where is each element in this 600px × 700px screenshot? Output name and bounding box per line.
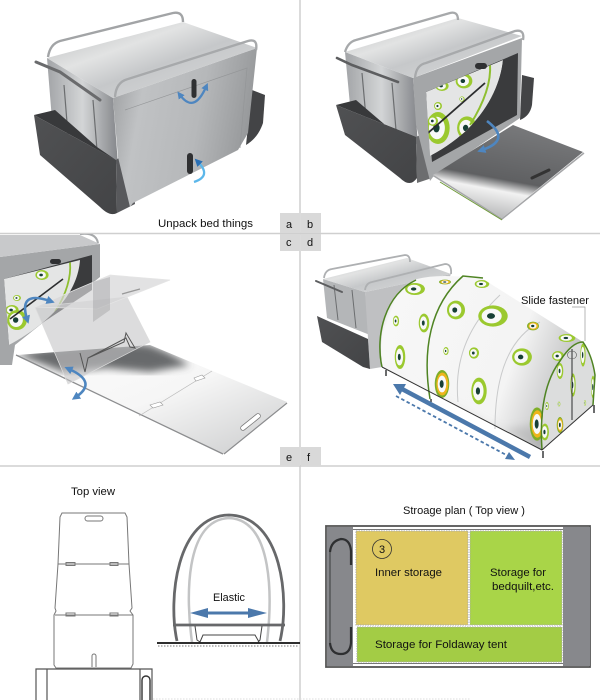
tab b: b bbox=[307, 219, 313, 231]
tab c: c bbox=[286, 237, 292, 249]
title: Stroage plan ( Top view ) bbox=[403, 505, 525, 517]
tray bbox=[317, 316, 370, 369]
opening bbox=[426, 53, 518, 162]
handle bbox=[85, 516, 103, 521]
right end panel bbox=[563, 527, 590, 666]
outer arch bbox=[174, 515, 284, 641]
label: inner storage: Inner storage bbox=[375, 567, 442, 579]
zone: foldaway tent bbox=[357, 627, 562, 662]
side handle bbox=[36, 62, 100, 100]
tent eyes bbox=[393, 280, 575, 441]
left side face bbox=[47, 58, 118, 165]
front face bbox=[113, 48, 257, 207]
fold plate bbox=[433, 125, 583, 218]
tab e bbox=[280, 447, 300, 466]
plate outline bbox=[54, 513, 133, 668]
arrow: elastic bbox=[190, 608, 267, 618]
box side bbox=[323, 279, 370, 335]
tray bbox=[336, 100, 416, 137]
box front bbox=[365, 274, 451, 369]
frame bbox=[0, 244, 100, 365]
tab a: a bbox=[286, 219, 293, 231]
arrow: dashed slide direction bbox=[396, 396, 515, 460]
zipper bbox=[571, 349, 573, 420]
tent body shadow bbox=[508, 424, 541, 448]
top face bbox=[47, 22, 257, 98]
large plate bbox=[112, 366, 287, 454]
badge 3: 3 bbox=[379, 544, 385, 556]
icon: rotate arrow lower bbox=[69, 369, 85, 397]
tent feet bbox=[386, 370, 594, 458]
panel: step b opened box bbox=[336, 13, 584, 220]
slots bbox=[66, 562, 118, 667]
leader line bbox=[572, 307, 585, 341]
heading: unpack bed things: Unpack bed things bbox=[158, 218, 254, 230]
opening bbox=[4, 255, 92, 345]
tab a bbox=[280, 213, 300, 233]
badge 3 bbox=[372, 540, 392, 558]
top face bbox=[345, 18, 522, 78]
ground bbox=[157, 642, 300, 644]
panel: step a closed box bbox=[34, 13, 265, 214]
tab d: d bbox=[307, 237, 313, 249]
fold lines bbox=[55, 564, 133, 615]
plate shadow bbox=[15, 340, 190, 372]
box top bbox=[323, 258, 451, 292]
tab b bbox=[301, 213, 321, 233]
label: elastic: Elastic bbox=[213, 592, 245, 604]
tab f: f bbox=[307, 452, 311, 464]
zone: bedquilt bbox=[470, 531, 562, 625]
panel: side section elastic bbox=[157, 515, 300, 646]
tent seams bbox=[457, 295, 540, 429]
plate handle bbox=[243, 416, 258, 428]
icon: rotate arrow upper bbox=[180, 87, 206, 103]
outer frame bbox=[326, 526, 590, 667]
lock bracket bbox=[80, 333, 135, 372]
tray right part bbox=[246, 90, 265, 145]
translucent folded panel bbox=[35, 297, 150, 384]
frame bbox=[413, 38, 522, 181]
tray outer bbox=[34, 115, 117, 214]
panel: storage plan bbox=[326, 505, 590, 667]
bed bbox=[195, 626, 262, 642]
label: storage for foldaway tent: Storage for Foldaway tent bbox=[375, 639, 507, 651]
zipper marker bbox=[568, 351, 576, 359]
top face bbox=[0, 235, 100, 257]
tent roll bbox=[4, 260, 80, 345]
hook bbox=[142, 676, 150, 700]
tent arches bbox=[380, 276, 595, 450]
left end panel bbox=[327, 527, 353, 666]
translucent top panel bbox=[35, 275, 170, 309]
rail bbox=[80, 234, 98, 243]
plate slots bbox=[150, 375, 205, 408]
front face eyes bbox=[541, 343, 595, 440]
rails bbox=[48, 13, 183, 57]
tab f bbox=[301, 447, 321, 466]
tent body bbox=[381, 276, 595, 450]
tray inner wall bbox=[34, 110, 116, 160]
left handle bbox=[330, 539, 351, 654]
label: top view: Top view bbox=[71, 486, 115, 498]
label: slide fastener: Slide fastener bbox=[521, 295, 589, 307]
zone: inner storage bbox=[356, 531, 468, 625]
latch bbox=[475, 63, 487, 69]
tent roll bbox=[426, 60, 503, 156]
inner rails bbox=[353, 530, 563, 664]
tab d bbox=[301, 234, 321, 251]
label: storage for bedquilt: Storage for bbox=[490, 567, 546, 579]
inner arch bbox=[189, 518, 270, 642]
icon: rotate arrow lower bbox=[194, 162, 204, 182]
box below bbox=[36, 669, 152, 700]
tent front face bbox=[542, 342, 595, 450]
label: bedquilt: bedquilt,etc. bbox=[492, 581, 554, 593]
panel: top view diagram bbox=[36, 486, 152, 700]
bar bbox=[173, 624, 285, 626]
icon: rotate arrow upper bbox=[25, 298, 50, 319]
tab c bbox=[280, 234, 300, 251]
icon: rotate arrow bbox=[482, 121, 498, 150]
tab e: e bbox=[286, 452, 292, 464]
arrow: solid slide direction bbox=[393, 384, 530, 457]
panel: step d deployed tent bbox=[316, 255, 595, 460]
slide latches bbox=[192, 79, 196, 98]
panel: step c unfolding plates bbox=[0, 234, 287, 454]
